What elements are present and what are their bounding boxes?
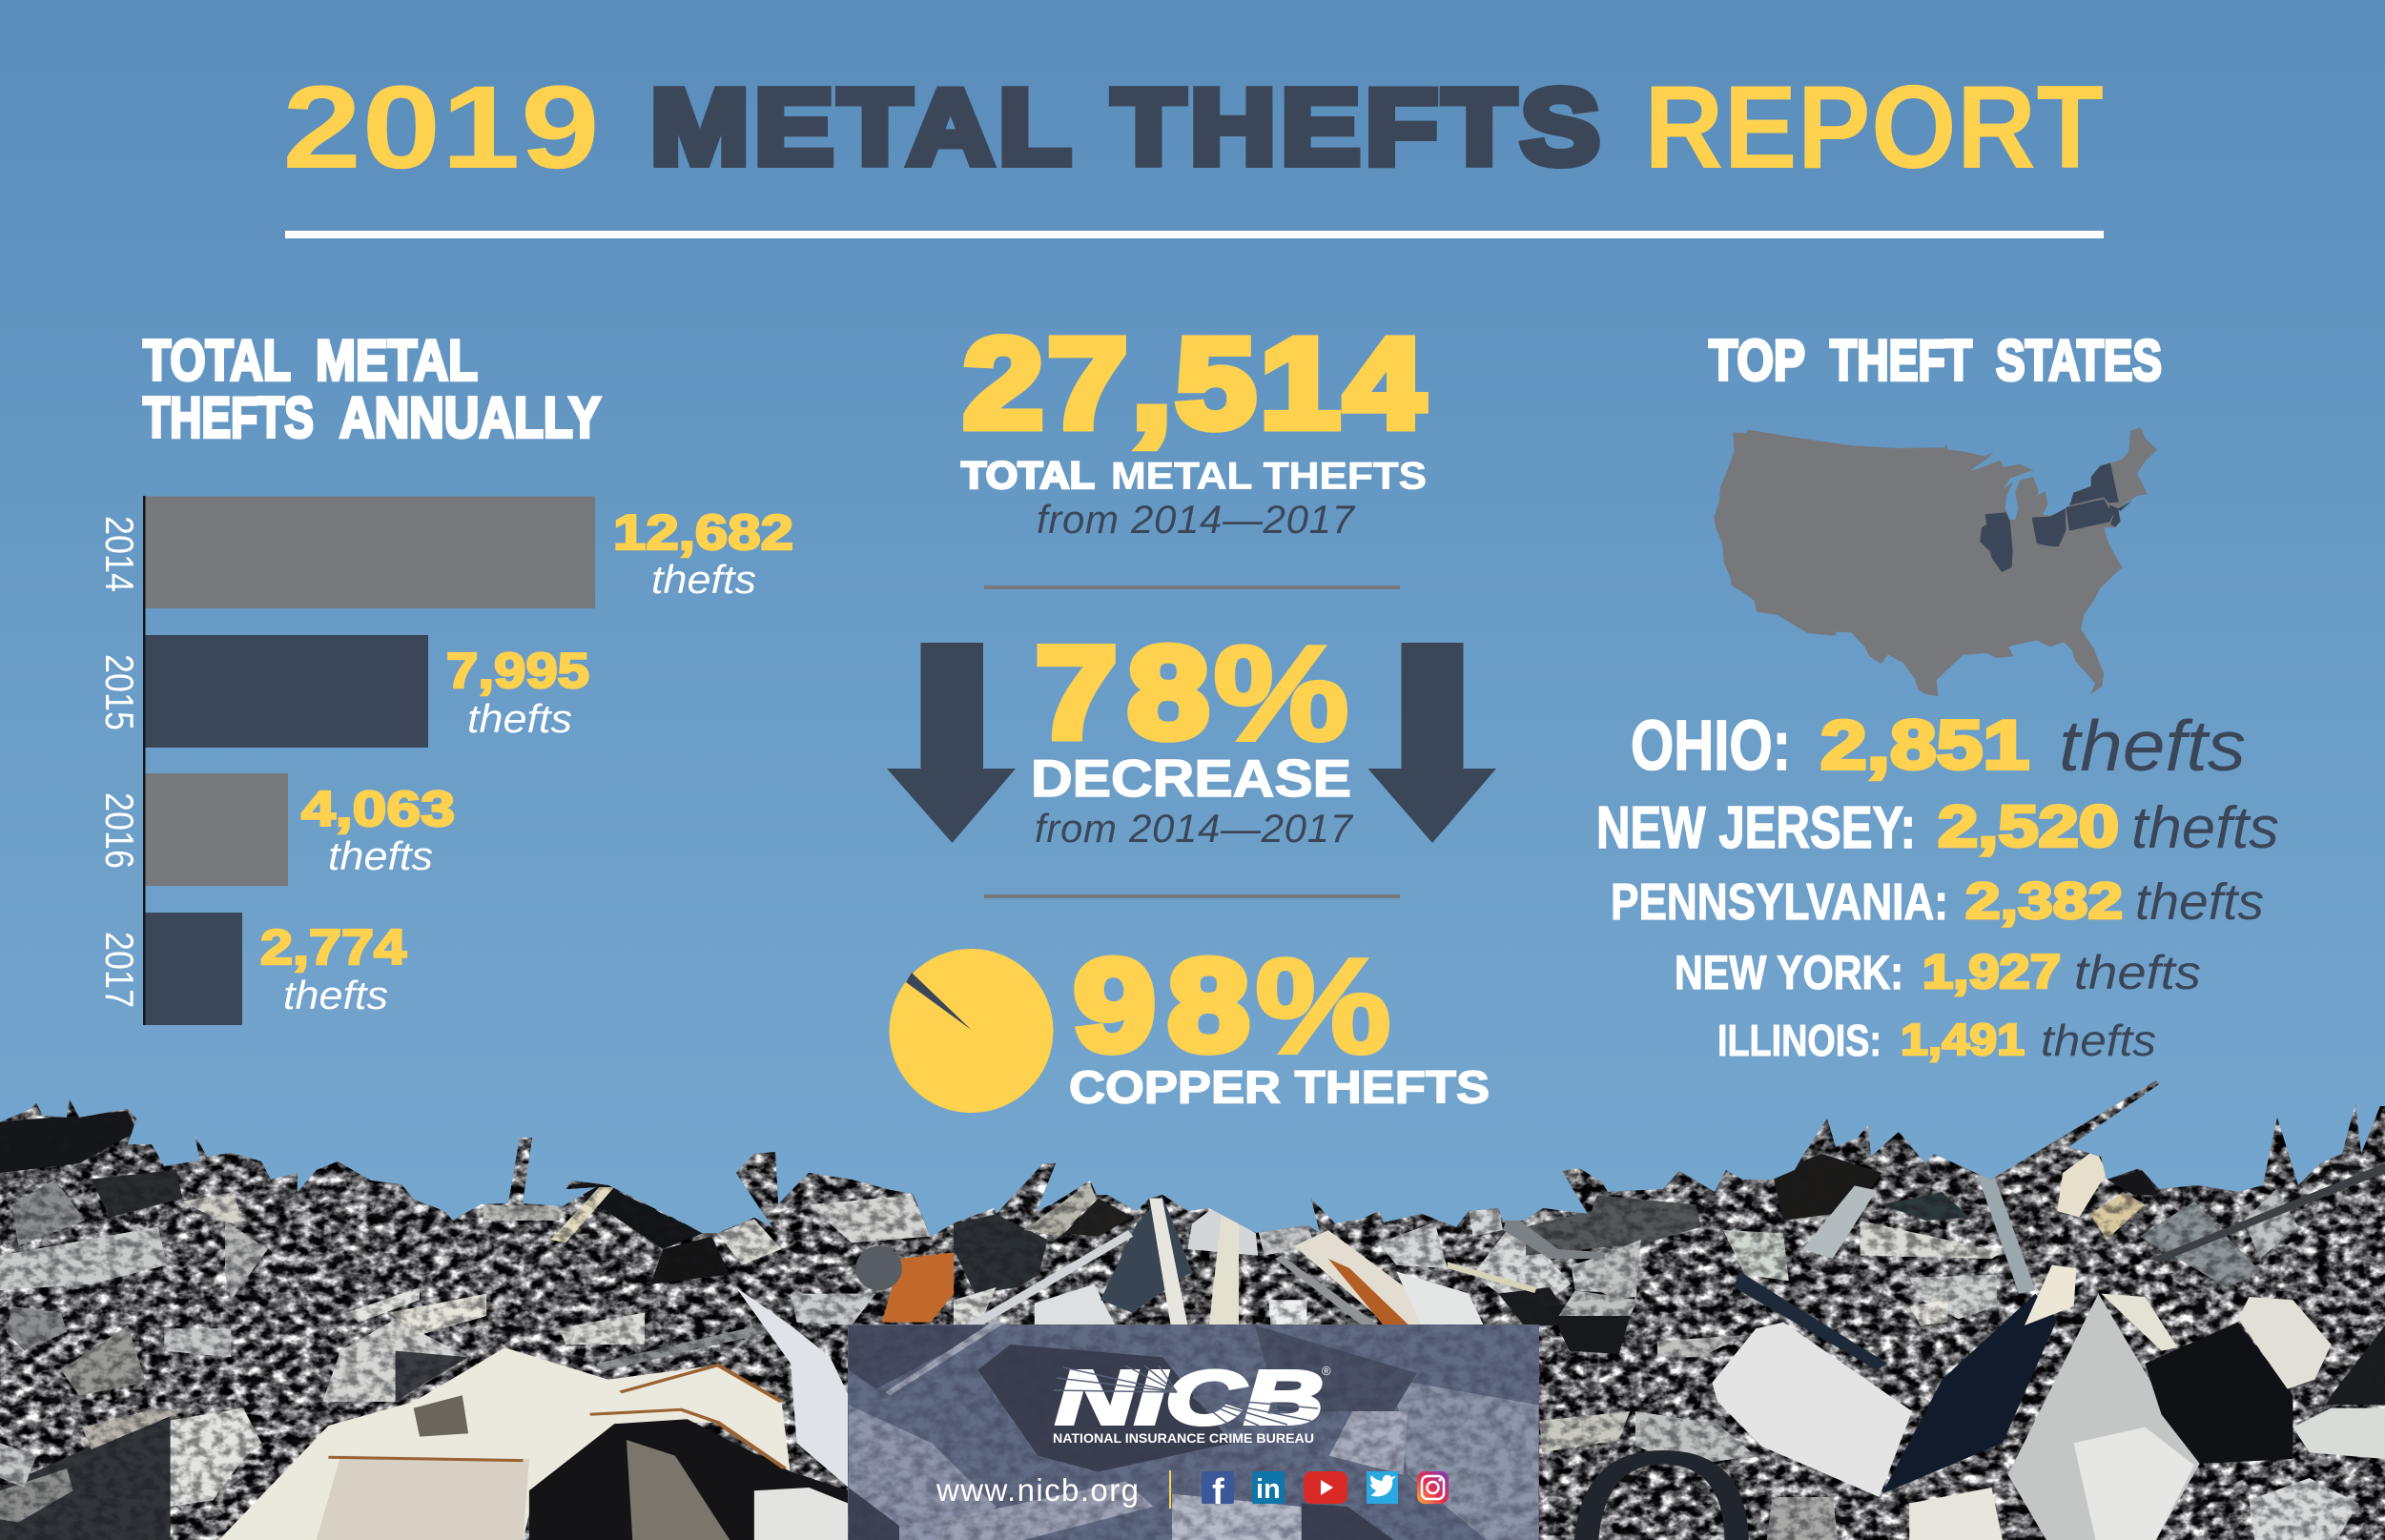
bar 2015: 2015 bbox=[97, 654, 142, 730]
scrap metal pile bbox=[0, 1078, 2385, 1540]
row: Pennsylvania: PENNSYLVANIA: bbox=[1611, 873, 1948, 931]
row: New Jersey: 2,520 bbox=[1938, 793, 2119, 858]
row: New York bbox=[1675, 945, 2201, 999]
icon: facebook bbox=[1202, 1471, 1234, 1512]
heading: total metal thefts annually: ANNUALLY bbox=[339, 385, 601, 450]
scrap: right pile shapes bbox=[1526, 1154, 2385, 1540]
heading: top theft states: THEFT bbox=[1830, 328, 1972, 393]
bar 2016: 2016 bbox=[97, 792, 142, 869]
bar 2017: 2017 bbox=[97, 932, 142, 1008]
state: New York bbox=[2069, 463, 2132, 511]
icon: youtube bbox=[1304, 1471, 1347, 1504]
state: Pennsylvania bbox=[2066, 499, 2114, 531]
icon: facebook: f bbox=[1212, 1472, 1224, 1512]
panel: top theft states bbox=[1596, 328, 2279, 1065]
stat: 27,514 total metal thefts bbox=[961, 313, 1427, 542]
logo: NICB: NATIONAL INSURANCE CRIME BUREAU bbox=[1053, 1430, 1314, 1446]
panel: total metal thefts annually bbox=[97, 328, 793, 1025]
stat: 98% copper thefts: 98 bbox=[1074, 933, 1249, 1078]
heading: top theft states bbox=[1709, 328, 2162, 393]
row: Illinois: 1,491 bbox=[1901, 1015, 2025, 1064]
map: United States bbox=[1714, 427, 2157, 696]
website address: www.nicb.org bbox=[935, 1472, 1139, 1508]
title rule bbox=[285, 231, 2104, 238]
heading: total metal thefts annually: METAL bbox=[316, 328, 478, 393]
state: Ohio bbox=[2032, 508, 2066, 546]
bar 2017: 2,774 bbox=[260, 920, 406, 975]
scrap: large smooth right pieces bbox=[1586, 1149, 2385, 1540]
icon: linkedin: in bbox=[1256, 1474, 1281, 1505]
heading: total metal thefts annually: TOTAL bbox=[143, 328, 291, 393]
bar 2014: 2014 bbox=[97, 516, 142, 592]
heading: total metal thefts annually: THEFTS bbox=[143, 385, 314, 450]
row: New Jersey: thefts bbox=[2131, 795, 2279, 861]
state: Illinois bbox=[1980, 512, 2013, 572]
panel: NICB footer bbox=[848, 1323, 1539, 1540]
stat: 78% decrease: 78 bbox=[1036, 620, 1209, 765]
row: Ohio: thefts bbox=[2059, 706, 2246, 786]
scrap: smooth center pieces bbox=[966, 1195, 1605, 1327]
stat: 78% decrease: % bbox=[1213, 618, 1349, 769]
logo: NICB: ® bbox=[1322, 1364, 1331, 1378]
scrap: center pile shapes bbox=[954, 1182, 1621, 1325]
row: New York: thefts bbox=[2074, 946, 2201, 999]
stat: 78% decrease bbox=[1031, 618, 1354, 851]
row: Ohio: OHIO: bbox=[1631, 706, 1791, 785]
panel: center statistics bbox=[887, 313, 1496, 1114]
row: Illinois: ILLINOIS: bbox=[1717, 1016, 1881, 1065]
stat: 98% copper thefts bbox=[1069, 931, 1490, 1114]
row: Illinois: thefts bbox=[2041, 1016, 2156, 1065]
bar 2016 bbox=[97, 773, 455, 886]
icon: linkedin bbox=[1252, 1471, 1285, 1505]
divider bbox=[984, 585, 1400, 589]
stat: 78% decrease: DECREASE bbox=[1031, 749, 1351, 808]
row: Pennsylvania bbox=[1611, 873, 2264, 931]
bar 2014: thefts bbox=[651, 557, 756, 602]
logo: NICB: NICB bbox=[1056, 1355, 1324, 1440]
bar 2015: 7,995 bbox=[446, 644, 589, 699]
bar 2017 bbox=[97, 913, 406, 1025]
row: New Jersey bbox=[1596, 793, 2279, 861]
icon: instagram bbox=[1417, 1471, 1449, 1504]
title: REPORT bbox=[1644, 62, 2104, 194]
bar 2014: 12,682 bbox=[613, 505, 793, 561]
scrap: left pile shapes bbox=[0, 1111, 931, 1540]
stat: 78% decrease: from 2014—2017 bbox=[1035, 806, 1354, 851]
scrap: texture overlay bbox=[0, 1078, 2385, 1540]
row: Illinois bbox=[1717, 1015, 2156, 1065]
row: Ohio: 2,851 bbox=[1820, 708, 2029, 784]
row: New York: NEW YORK: bbox=[1675, 946, 1903, 999]
title: METAL THEFTS bbox=[650, 68, 1600, 186]
row: Pennsylvania: thefts bbox=[2135, 873, 2264, 931]
footer background bbox=[848, 1323, 1539, 1540]
title: 2019 bbox=[282, 62, 600, 194]
bar 2014 bbox=[97, 496, 793, 608]
row: New York: 1,927 bbox=[1922, 945, 2061, 998]
heading: top theft states: TOP bbox=[1709, 328, 1805, 393]
stat: 27,514 total metal thefts: 27,514 bbox=[963, 313, 1425, 455]
bar 2015 bbox=[97, 635, 589, 748]
footer divider bbox=[1169, 1470, 1171, 1509]
logo: NICB bbox=[1053, 1355, 1331, 1446]
stat: 27,514 total metal thefts: from 2014—2017 bbox=[1037, 497, 1356, 542]
bar 2015: thefts bbox=[467, 696, 572, 741]
divider bbox=[984, 894, 1400, 898]
bar chart bbox=[97, 496, 793, 1025]
bar 2016: 4,063 bbox=[301, 782, 455, 837]
arrow: down left bbox=[887, 643, 1016, 843]
title bbox=[282, 62, 2104, 194]
pie chart: 98% copper bbox=[889, 949, 1053, 1113]
arrow: down right bbox=[1367, 643, 1496, 843]
stat: 27,514 total metal thefts: METAL THEFTS bbox=[1111, 456, 1427, 498]
state: New Jersey bbox=[2109, 504, 2121, 527]
bar 2017: thefts bbox=[283, 973, 388, 1017]
stat: 98% copper thefts: COPPER THEFTS bbox=[1069, 1062, 1490, 1114]
heading: total metal thefts annually bbox=[143, 328, 601, 450]
heading: top theft states: STATES bbox=[1996, 328, 2162, 393]
row: New Jersey: NEW JERSEY: bbox=[1596, 795, 1916, 861]
stat: 98% copper thefts: % bbox=[1255, 931, 1391, 1081]
bar 2016: thefts bbox=[328, 833, 433, 878]
row: Pennsylvania: 2,382 bbox=[1965, 873, 2123, 930]
state list bbox=[1596, 706, 2279, 1065]
icon: twitter bbox=[1367, 1471, 1398, 1504]
stat: 27,514 total metal thefts: TOTAL bbox=[961, 455, 1095, 497]
scrap: large smooth left sheet bbox=[219, 1246, 954, 1540]
row: Ohio bbox=[1631, 706, 2246, 786]
